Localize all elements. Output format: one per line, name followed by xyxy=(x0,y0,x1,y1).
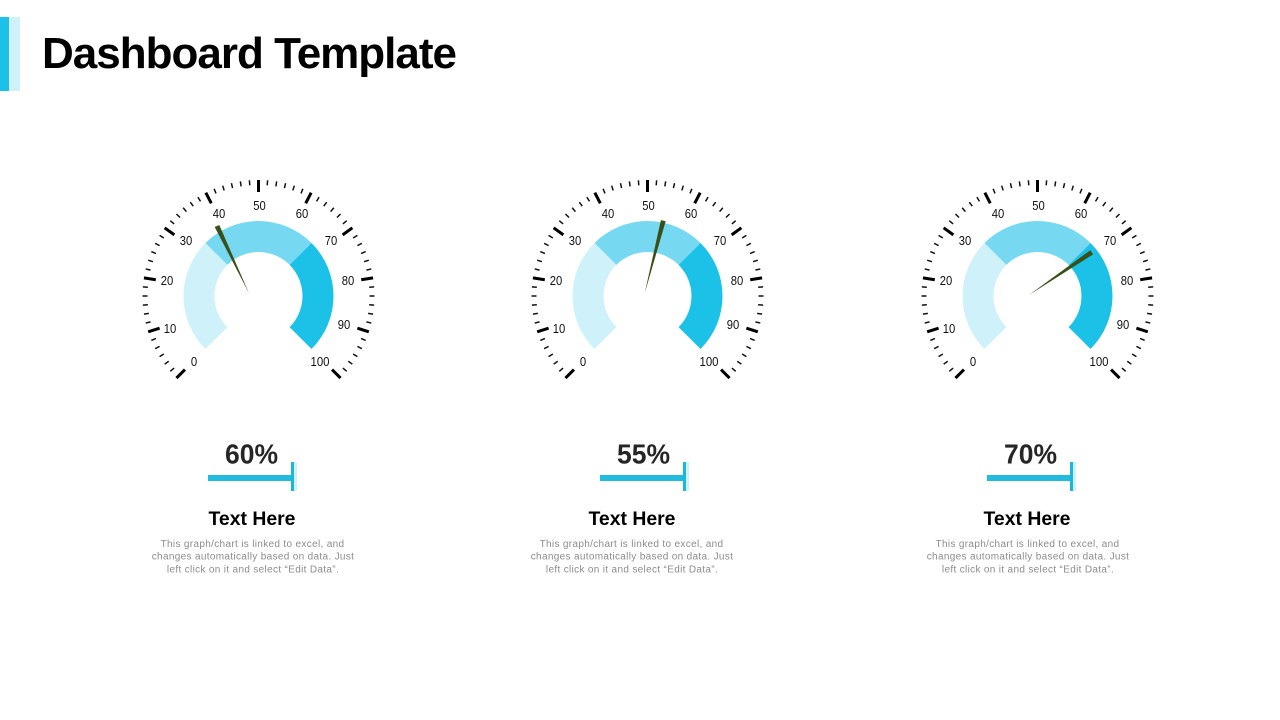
stat 2 description: left click on it and select “Edit Data”. xyxy=(546,564,718,576)
gauge 1 scale labels xyxy=(161,198,354,369)
stat 1 description xyxy=(152,539,354,576)
gauge 1 scale labels: 30 xyxy=(180,233,192,248)
stat 2 description: This graph/chart is linked to excel, and xyxy=(540,539,723,550)
gauge 1 scale labels: 10 xyxy=(164,321,176,336)
gauge 2 scale labels: 30 xyxy=(569,233,581,248)
stat 3 description: left click on it and select “Edit Data”. xyxy=(942,564,1114,576)
gauge 1 scale labels: 80 xyxy=(342,273,354,288)
stat 3 description: This graph/chart is linked to excel, and xyxy=(936,539,1119,550)
stat 2 value: 55% xyxy=(617,438,670,470)
gauge 1 scale labels: 0 xyxy=(191,354,197,369)
stat 3 description: changes automatically based on data. Just xyxy=(927,552,1129,562)
gauge 3 scale labels: 50 xyxy=(1032,198,1045,213)
gauge 2 scale labels xyxy=(550,198,743,369)
stat 1 xyxy=(152,438,354,576)
gauge 1 scale labels: 20 xyxy=(161,273,173,288)
gauge 3 scale labels: 30 xyxy=(959,233,971,248)
stat 2 description xyxy=(531,539,733,576)
gauge 2 scale labels: 20 xyxy=(550,273,562,288)
gauge 2 scale labels: 10 xyxy=(553,321,565,336)
gauge 1 tick scale xyxy=(142,180,374,378)
stat 1 value: 60% xyxy=(225,438,278,470)
gauge 3 scale labels: 70 xyxy=(1104,233,1116,248)
stat 1 heading: Text Here xyxy=(209,508,296,530)
stat 2 heading: Text Here xyxy=(589,508,676,530)
gauge 2 scale labels: 0 xyxy=(580,354,586,369)
title: Dashboard Template xyxy=(42,29,457,78)
gauge 3 scale labels: 100 xyxy=(1090,354,1108,369)
gauge 3 scale labels: 80 xyxy=(1121,273,1133,288)
gauge 1 scale labels: 60 xyxy=(296,206,308,221)
gauge 1 xyxy=(142,180,374,378)
gauge 2 scale labels: 80 xyxy=(731,273,743,288)
stat 1 description: left click on it and select “Edit Data”. xyxy=(167,564,339,576)
stat 3 description xyxy=(927,539,1129,576)
gauge 3 scale labels: 10 xyxy=(943,321,955,336)
gauge 1 scale labels: 100 xyxy=(310,354,330,369)
gauge 2 scale labels: 40 xyxy=(602,206,614,221)
gauge 2 scale labels: 60 xyxy=(685,206,697,221)
gauge 3 scale labels: 40 xyxy=(992,206,1004,221)
gauge 3 scale labels: 0 xyxy=(970,354,976,369)
stat 3 xyxy=(927,438,1129,576)
gauge 2 scale labels: 50 xyxy=(642,198,655,213)
gauge 3 scale labels xyxy=(940,198,1133,369)
stat 3 heading: Text Here xyxy=(984,508,1071,530)
gauge 3 xyxy=(922,180,1154,378)
gauge 1 coloured arc xyxy=(184,221,333,349)
stat 3 value: 70% xyxy=(1004,438,1057,470)
gauge 1 scale labels: 40 xyxy=(213,206,225,221)
gauge 2 xyxy=(532,180,764,378)
stat 3 bar xyxy=(987,462,1076,491)
gauge 2 tick scale xyxy=(532,180,764,378)
gauge 2 scale labels: 100 xyxy=(700,354,718,369)
gauge 2 coloured arc xyxy=(573,221,722,349)
stat 2 description: changes automatically based on data. Just xyxy=(531,552,733,562)
stat 1 bar xyxy=(208,462,297,491)
gauge 2 scale labels: 70 xyxy=(714,233,726,248)
gauge 1 scale labels: 70 xyxy=(325,233,337,248)
gauge 1 scale labels: 90 xyxy=(338,317,350,332)
gauge 3 tick scale xyxy=(922,180,1154,378)
gauge 3 coloured arc xyxy=(963,221,1112,349)
gauge 3 scale labels: 60 xyxy=(1075,206,1087,221)
stat 1 description: changes automatically based on data. Just xyxy=(152,552,354,562)
stat 2 xyxy=(531,438,733,576)
header accent bar xyxy=(0,17,20,91)
gauge 2 scale labels: 90 xyxy=(727,317,739,332)
gauge 3 scale labels: 20 xyxy=(940,273,952,288)
gauge 1 scale labels: 50 xyxy=(253,198,266,213)
stat 2 bar xyxy=(600,462,689,491)
gauge 2 needle xyxy=(645,220,666,293)
gauge 3 scale labels: 90 xyxy=(1117,317,1129,332)
gauge 3 needle xyxy=(1029,250,1093,295)
stat 1 description: This graph/chart is linked to excel, and xyxy=(161,539,344,550)
gauge 1 needle xyxy=(215,225,249,293)
